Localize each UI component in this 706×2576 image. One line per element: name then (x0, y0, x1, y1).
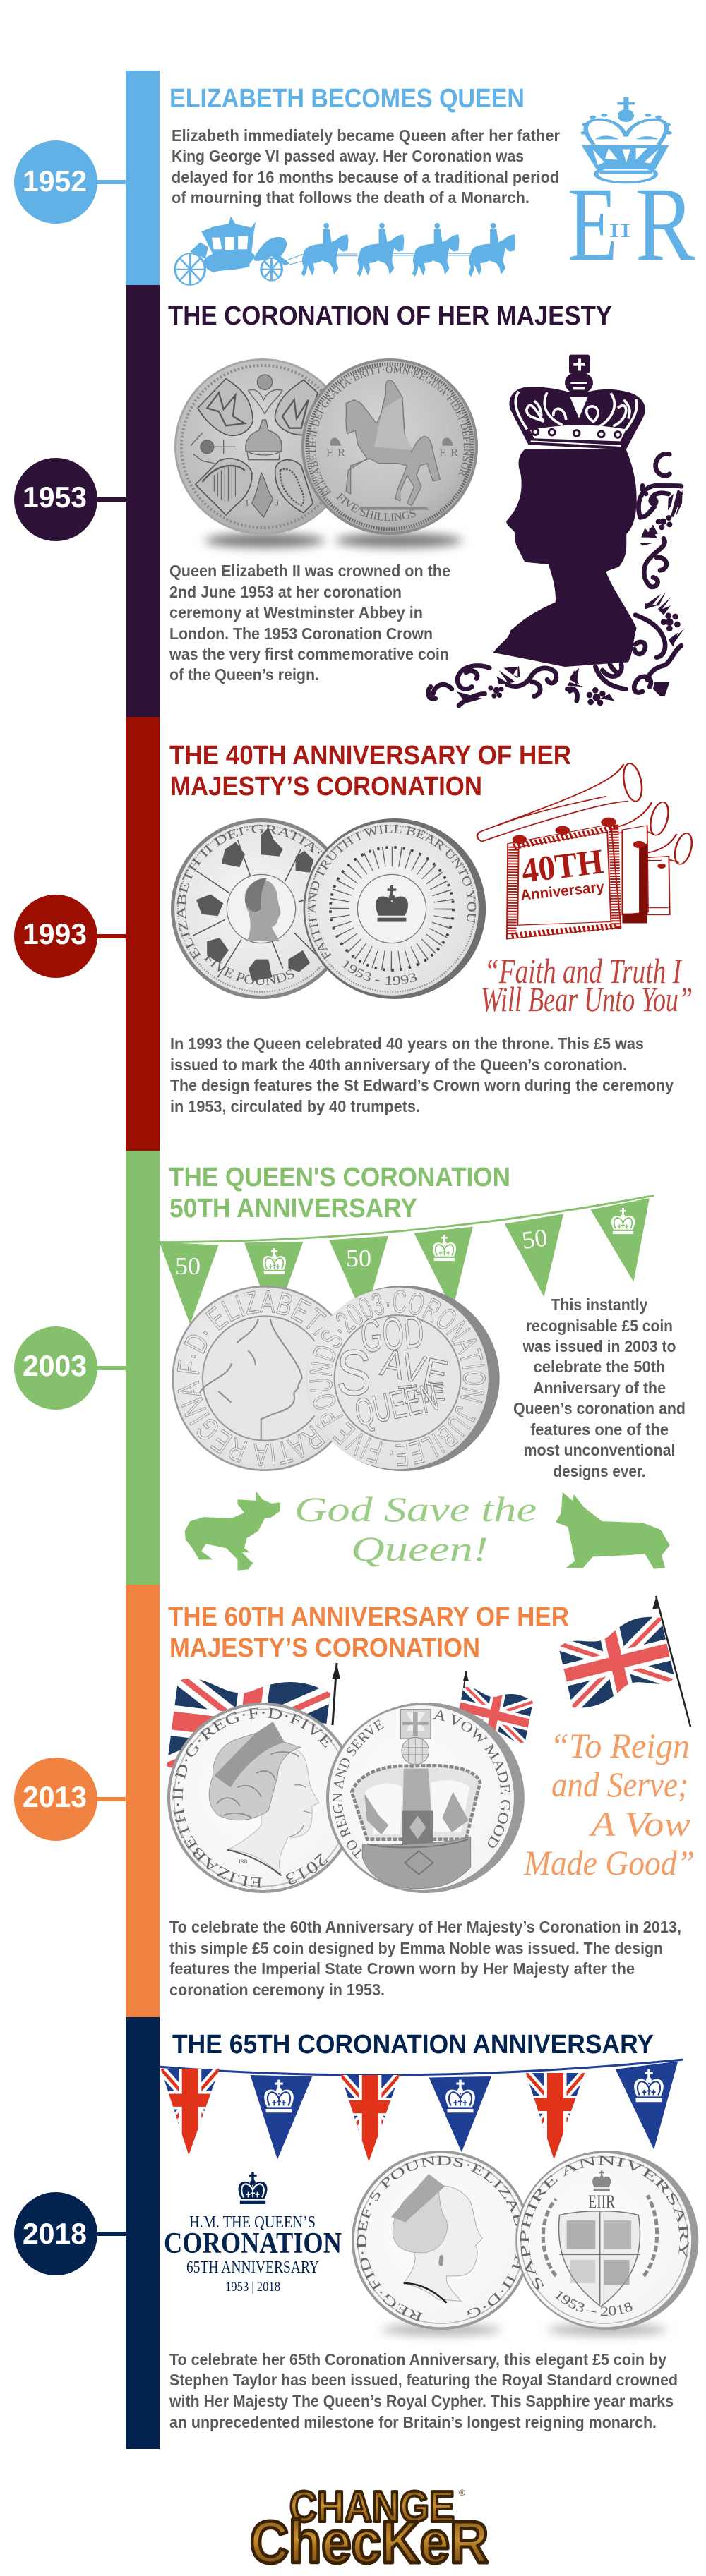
heading: 2003 (169, 1163, 510, 1223)
year marker 1993: 1993 (23, 917, 87, 950)
year marker 1953: 1953 (23, 480, 87, 514)
coin: 1953 obverse equestrian: E (439, 446, 446, 459)
logo: H.M. The Queen's Coronation: H.M. THE QUEEN’S (189, 2213, 316, 2232)
coin: 2003 God Save the Queen: AVE (377, 1340, 452, 1397)
quote: 2013: and Serve; (551, 1765, 688, 1804)
heading: 2003: THE QUEEN'S CORONATION (169, 1163, 510, 1192)
logo: Change Checker: ChecKeR (250, 2509, 489, 2575)
text block: 1952 (172, 126, 560, 207)
coin: 1953 reverse shields: 1 (245, 498, 249, 508)
coin: 1953 obverse equestrian: ELIZABETH·II·DEI·GRATIA·BRITT·OMN·REGINA·FIDEI·DEFENSOR (309, 365, 470, 497)
icon: union flag right (459, 1671, 533, 1743)
text block: 1953: London. The 1953 Coronation Crown (169, 624, 433, 643)
coin: 1953 reverse shields: 3 (274, 498, 279, 508)
text block: 1953 (169, 562, 450, 684)
text block: 1952: of mourning that follows the death of a Monarch. (172, 188, 530, 207)
icon: corgi left (185, 1491, 280, 1571)
quote: 2013: A Vow (589, 1804, 690, 1844)
coin: 2003 line portrait (132, 1246, 397, 1511)
text block: 1952: Elizabeth immediately became Queen after her father (172, 126, 560, 145)
quote: 2013: “To Reign (550, 1726, 690, 1765)
text block: 2018: an unprecedented milestone for Britain’s longest reigning monarch. (169, 2413, 657, 2431)
text block: 2018 (169, 2350, 678, 2431)
text block: 2003: celebrate the 50th (534, 1357, 665, 1376)
heading: 2013: THE 60TH ANNIVERSARY OF HER (168, 1602, 569, 1632)
text block: 2018: To celebrate her 65th Coronation Anniversary, this elegant £5 coin by (169, 2350, 666, 2369)
text block: 2013: this simple £5 coin designed by Emma Noble was issued. The design (169, 1939, 663, 1957)
text block: 1993 (170, 1034, 674, 1115)
coin shadows 2018 (381, 2325, 667, 2335)
coin: 2003 God Save the Queen: FIVE POUNDS·2003·CORONATION JUBILEE· (309, 1290, 486, 1466)
illustration: trumpets and 40th banner (477, 763, 695, 939)
logo: Change Checker: ® (459, 2488, 465, 2498)
text block: 2003: Queen’s coronation and (513, 1399, 686, 1417)
logo: H.M. The Queen's Coronation (164, 2172, 342, 2294)
icon: union flag left (167, 1662, 340, 1768)
text block: 2018: Stephen Taylor has been issued, featuring the Royal Standard crowned (169, 2371, 678, 2389)
icon: crown and EIIR cypher: E (568, 166, 618, 283)
timeline bar (126, 71, 160, 2449)
logo: Change Checker (250, 2483, 489, 2575)
text block: 1953: ceremony at Westminster Abbey in (169, 603, 423, 622)
icon: state coach and horses (175, 217, 515, 285)
text block: 1953: was the very first commemorative coin (169, 645, 449, 663)
text block: 1993: issued to mark the 40th anniversary of the Queen’s coronation. (170, 1056, 627, 1074)
icon: crown and EIIR cypher: II (609, 220, 631, 241)
text block: 2003: Anniversary of the (533, 1379, 666, 1397)
heading: 1993: MAJESTY’S CORONATION (170, 772, 482, 802)
text block: 2003: most unconventional (524, 1441, 675, 1459)
text block: 2003: was issued in 2003 to (522, 1337, 676, 1355)
icon: crown and EIIR cypher: R (635, 166, 695, 283)
heading: 2013 (168, 1602, 569, 1663)
coin: 2003 God Save the Queen: S (336, 1336, 371, 1409)
logo: H.M. The Queen's Coronation: 1953 | 2018 (225, 2280, 280, 2294)
text block: 2013: To celebrate the 60th Anniversary of Her Majesty’s Coronation in 2013, (169, 1918, 681, 1936)
quote: 2013 (523, 1726, 695, 1882)
bunting: 2003: 50 (346, 1245, 371, 1272)
coin: 2018 royal arms: EIIR (588, 2191, 616, 2213)
heading: 1993 (169, 741, 571, 802)
year marker 1953 (14, 458, 127, 541)
coin: 1953 obverse equestrian: FIVE SHILLINGS (336, 492, 416, 521)
coin: 2013 imperial state crown (326, 1703, 525, 1893)
logo: Change Checker: CHANGE (289, 2483, 455, 2532)
heading: 2018: THE 65TH CORONATION ANNIVERSARY (172, 2030, 654, 2060)
coin: 2003 God Save the Queen: GOD (359, 1305, 426, 1362)
year marker 1952: 1952 (23, 164, 87, 198)
text block: 1993: in 1953, circulated by 40 trumpets. (170, 1097, 420, 1115)
year marker 2018 (14, 2192, 127, 2275)
year marker 1993 (14, 895, 127, 978)
text block: 1953: of the Queen’s reign. (169, 665, 319, 684)
coin: 1953 reverse shields (174, 358, 351, 535)
coin: 2003 God Save the Queen: QUEEN (351, 1374, 442, 1435)
quote: God Save the Queen (294, 1489, 537, 1568)
heading: 1993: THE 40TH ANNIVERSARY OF HER (169, 741, 571, 770)
coin: 2018 royal arms: SAPPHIRE ANNIVERSARY (520, 2156, 689, 2290)
text block: 2013: coronation ceremony in 1953. (169, 1981, 385, 1999)
quote: God Save the Queen: Queen! (351, 1529, 489, 1568)
coin: 2013 imperial state crown: A VOW MADE GOOD (433, 1710, 510, 1848)
year marker 1952 (14, 140, 127, 224)
quote: 1993 (481, 951, 693, 1019)
bunting: 2003: 50 (520, 1223, 549, 1254)
icon: union flag large (545, 1595, 690, 1727)
text block: 2018: with Her Majesty The Queen’s Royal Cypher. This Sapphire year marks (169, 2392, 674, 2410)
heading: 2013: MAJESTY’S CORONATION (169, 1633, 480, 1663)
coin: 2018 portrait: REG·FID·DEF·5 POUNDS·ELIZABETH II·D·G (357, 2156, 521, 2322)
text block: 1953: Queen Elizabeth II was crowned on the (169, 562, 450, 580)
year marker 2003 (14, 1326, 127, 1410)
icon: corgi right (556, 1492, 670, 1569)
text block: 2003: This instantly (551, 1295, 648, 1314)
text block: 2013: features the Imperial State Crown worn by Her Majesty after the (169, 1959, 635, 1978)
text block: 2003: designs ever. (554, 1462, 645, 1480)
text block: 2003: features one of the (530, 1420, 669, 1439)
heading: 2003: 50TH ANNIVERSARY (169, 1194, 417, 1223)
bunting: 2018 (156, 2060, 683, 2162)
banner text 40th anniversary: Anniversary (520, 879, 605, 904)
year marker 2013: 2013 (23, 1780, 87, 1813)
year marker 2003: 2003 (23, 1349, 87, 1382)
coin: 1993 portrait and riders (171, 818, 328, 999)
heading: 1953: THE CORONATION OF HER MAJESTY (168, 301, 612, 331)
coin: 1993 portrait and riders: ELIZABETH II DEI·GRATIA·REGINA (176, 824, 319, 960)
coin: 2003 God Save the Queen: THE (397, 1377, 446, 1410)
coin: 2013 portrait: ELIZABETH·II·D·G·REG·F·D·FIVE (172, 1707, 332, 1888)
text block: 1993: In 1993 the Queen celebrated 40 years on the throne. This £5 was (170, 1034, 644, 1053)
text block: 1953: 2nd June 1953 at her coronation (169, 583, 402, 601)
text block: 2003 (513, 1295, 686, 1480)
quote: 2013: Made Good” (523, 1843, 695, 1882)
text block: 2003: recognisable £5 coin (526, 1317, 673, 1335)
year marker 2018: 2018 (23, 2217, 87, 2250)
coin: 1953 obverse equestrian: R (450, 446, 459, 459)
heading: 1952: ELIZABETH BECOMES QUEEN (169, 84, 525, 114)
bunting: 2003: 50 (175, 1252, 201, 1280)
bunting: 2003 (160, 1195, 654, 1324)
coin: 2003 line portrait: ELIZABETH II DEI GRATIA REGINA F·D· (176, 1290, 326, 1466)
coin: 2018 royal arms: 1953 – 2018 (554, 2291, 633, 2316)
icon: crown and EIIR cypher (568, 97, 695, 283)
coin: 2013 imperial state crown: TO REIGN AND SERVE (333, 1719, 384, 1859)
logo: H.M. The Queen's Coronation: 65TH ANNIVERSARY (186, 2258, 319, 2277)
illustration: queen silhouette with crown and flourishes (429, 355, 685, 706)
logo: H.M. The Queen's Coronation: CORONATION (164, 2227, 342, 2260)
coin: 2013 portrait: 2013 (286, 1853, 328, 1884)
coin shadows 1953 (205, 533, 462, 548)
text block: 1952: delayed for 16 months because of a traditional period (172, 168, 559, 186)
coin: 1993 portrait and riders: FIVE POUNDS (203, 957, 294, 985)
coin: 2013 portrait: IRB (239, 1858, 248, 1865)
coin: 1953 obverse equestrian: E (326, 446, 333, 459)
coin: 1953 obverse equestrian: R (337, 446, 346, 459)
text block: 1993: The design features the St Edward’s Crown worn during the ceremony (170, 1076, 674, 1094)
coin: 1993 crown and trumpets: 1953 - 1993 (342, 960, 417, 985)
coin: 1993 crown and trumpets: FAITH AND TRUTH I WILL BEAR UNTO YOU (308, 824, 476, 960)
quote: God Save the Queen: God Save the (294, 1489, 537, 1529)
banner text 40th anniversary: 40TH (520, 841, 606, 890)
text block: 1952: King George VI passed away. Her Coronation was (172, 147, 524, 165)
text block: 2013 (169, 1918, 681, 1999)
year marker 2013 (14, 1758, 127, 1841)
